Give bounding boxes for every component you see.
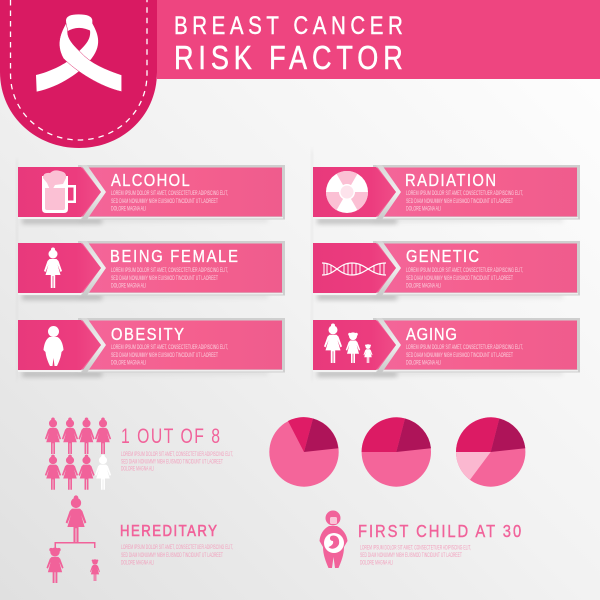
- icon: obese woman: [44, 326, 64, 366]
- pie chart 2: [362, 417, 431, 487]
- block: 1 out of 8: [121, 424, 233, 472]
- icon: three generations: [324, 324, 372, 363]
- heading: RADIATION: [405, 171, 496, 190]
- panel: genetic: [313, 241, 580, 300]
- panel: alcohol: [18, 165, 285, 224]
- text block: LOREM IPSUM DOLOR SIT AMET, CONSECTETUER ADIPISCING ELIT,: [121, 545, 233, 551]
- panel: being female: [18, 241, 285, 300]
- title line: risk factor: RISK FACTOR: [174, 41, 403, 77]
- heading: BEING FEMALE: [110, 247, 238, 266]
- heading: GENETIC: [406, 247, 479, 266]
- text block: [360, 546, 471, 566]
- heading: 1 OUT OF 8: [121, 424, 220, 448]
- text block: DOLORE MAGNA ALI: [406, 206, 441, 212]
- text block: LOREM IPSUM DOLOR SIT AMET, CONSECTETUER ADIPISCING ELIT,: [360, 546, 471, 552]
- ribbon badge: [0, 0, 157, 148]
- heading: HEREDITARY: [120, 523, 217, 540]
- heading: OBESITY: [111, 325, 184, 344]
- text block: DOLORE MAGNA ALI: [406, 284, 441, 290]
- title line: breast cancer: BREAST CANCER: [174, 11, 403, 39]
- text block: DOLORE MAGNA ALI: [406, 360, 441, 366]
- heading: AGING: [406, 325, 457, 344]
- icon: beer mug: [42, 170, 76, 213]
- text block: [111, 191, 228, 212]
- heading: FIRST CHILD AT 30: [358, 522, 521, 541]
- text block: LOREM IPSUM DOLOR SIT AMET, CONSECTETUER ADIPISCING ELIT,: [406, 191, 523, 197]
- pie chart 1: [269, 417, 339, 487]
- text block: [111, 268, 228, 290]
- text block: [406, 191, 523, 212]
- heading: ALCOHOL: [111, 171, 190, 190]
- icon: family tree: [46, 495, 100, 583]
- icon: awareness ribbon: [36, 14, 122, 92]
- icon: woman: [44, 248, 62, 288]
- text block: [406, 345, 523, 366]
- block: first child at 30: [358, 522, 521, 566]
- block: hereditary: [120, 523, 233, 566]
- panel: aging: [313, 318, 580, 377]
- icon: eight women pictogram: [45, 418, 111, 490]
- icon: pregnant woman: [320, 510, 348, 568]
- text block: [121, 452, 233, 472]
- text block: DOLORE MAGNA ALI: [121, 466, 154, 472]
- text block: LOREM IPSUM DOLOR SIT AMET, CONSECTETUER ADIPISCING ELIT,: [111, 268, 228, 274]
- text block: SED DIAM NONUMMY NIBH EUISMOD TINCIDUNT UT LAOREET: [406, 276, 513, 282]
- text block: DOLORE MAGNA ALI: [111, 206, 146, 212]
- text block: LOREM IPSUM DOLOR SIT AMET, CONSECTETUER ADIPISCING ELIT,: [121, 452, 233, 458]
- text block: DOLORE MAGNA ALI: [121, 560, 154, 566]
- text block: DOLORE MAGNA ALI: [360, 560, 393, 566]
- text block: SED DIAM NONUMMY NIBH EUISMOD TINCIDUNT UT LAOREET: [111, 353, 218, 359]
- text block: LOREM IPSUM DOLOR SIT AMET, CONSECTETUER ADIPISCING ELIT,: [111, 345, 228, 351]
- text block: DOLORE MAGNA ALI: [111, 284, 146, 290]
- text block: LOREM IPSUM DOLOR SIT AMET, CONSECTETUER ADIPISCING ELIT,: [111, 191, 228, 197]
- text block: SED DIAM NONUMMY NIBH EUISMOD TINCIDUNT UT LAOREET: [360, 553, 462, 559]
- text block: SED DIAM NONUMMY NIBH EUISMOD TINCIDUNT UT LAOREET: [406, 199, 513, 205]
- pie chart 3: [456, 417, 525, 487]
- text block: SED DIAM NONUMMY NIBH EUISMOD TINCIDUNT UT LAOREET: [121, 553, 223, 559]
- header bar: [157, 0, 600, 79]
- text block: SED DIAM NONUMMY NIBH EUISMOD TINCIDUNT UT LAOREET: [111, 276, 218, 282]
- text block: DOLORE MAGNA ALI: [111, 360, 146, 366]
- text block: [121, 545, 233, 566]
- panel: obesity: [18, 318, 285, 377]
- text block: SED DIAM NONUMMY NIBH EUISMOD TINCIDUNT UT LAOREET: [111, 199, 218, 205]
- text block: [406, 268, 523, 290]
- text block: LOREM IPSUM DOLOR SIT AMET, CONSECTETUER ADIPISCING ELIT,: [406, 345, 523, 351]
- text block: LOREM IPSUM DOLOR SIT AMET, CONSECTETUER ADIPISCING ELIT,: [406, 268, 523, 274]
- icon: radiation symbol: [326, 171, 368, 213]
- text block: [111, 345, 228, 366]
- text block: SED DIAM NONUMMY NIBH EUISMOD TINCIDUNT UT LAOREET: [406, 353, 513, 359]
- text block: SED DIAM NONUMMY NIBH EUISMOD TINCIDUNT UT LAOREET: [121, 460, 223, 466]
- panel: radiation: [313, 165, 580, 224]
- icon: dna helix: [322, 263, 386, 275]
